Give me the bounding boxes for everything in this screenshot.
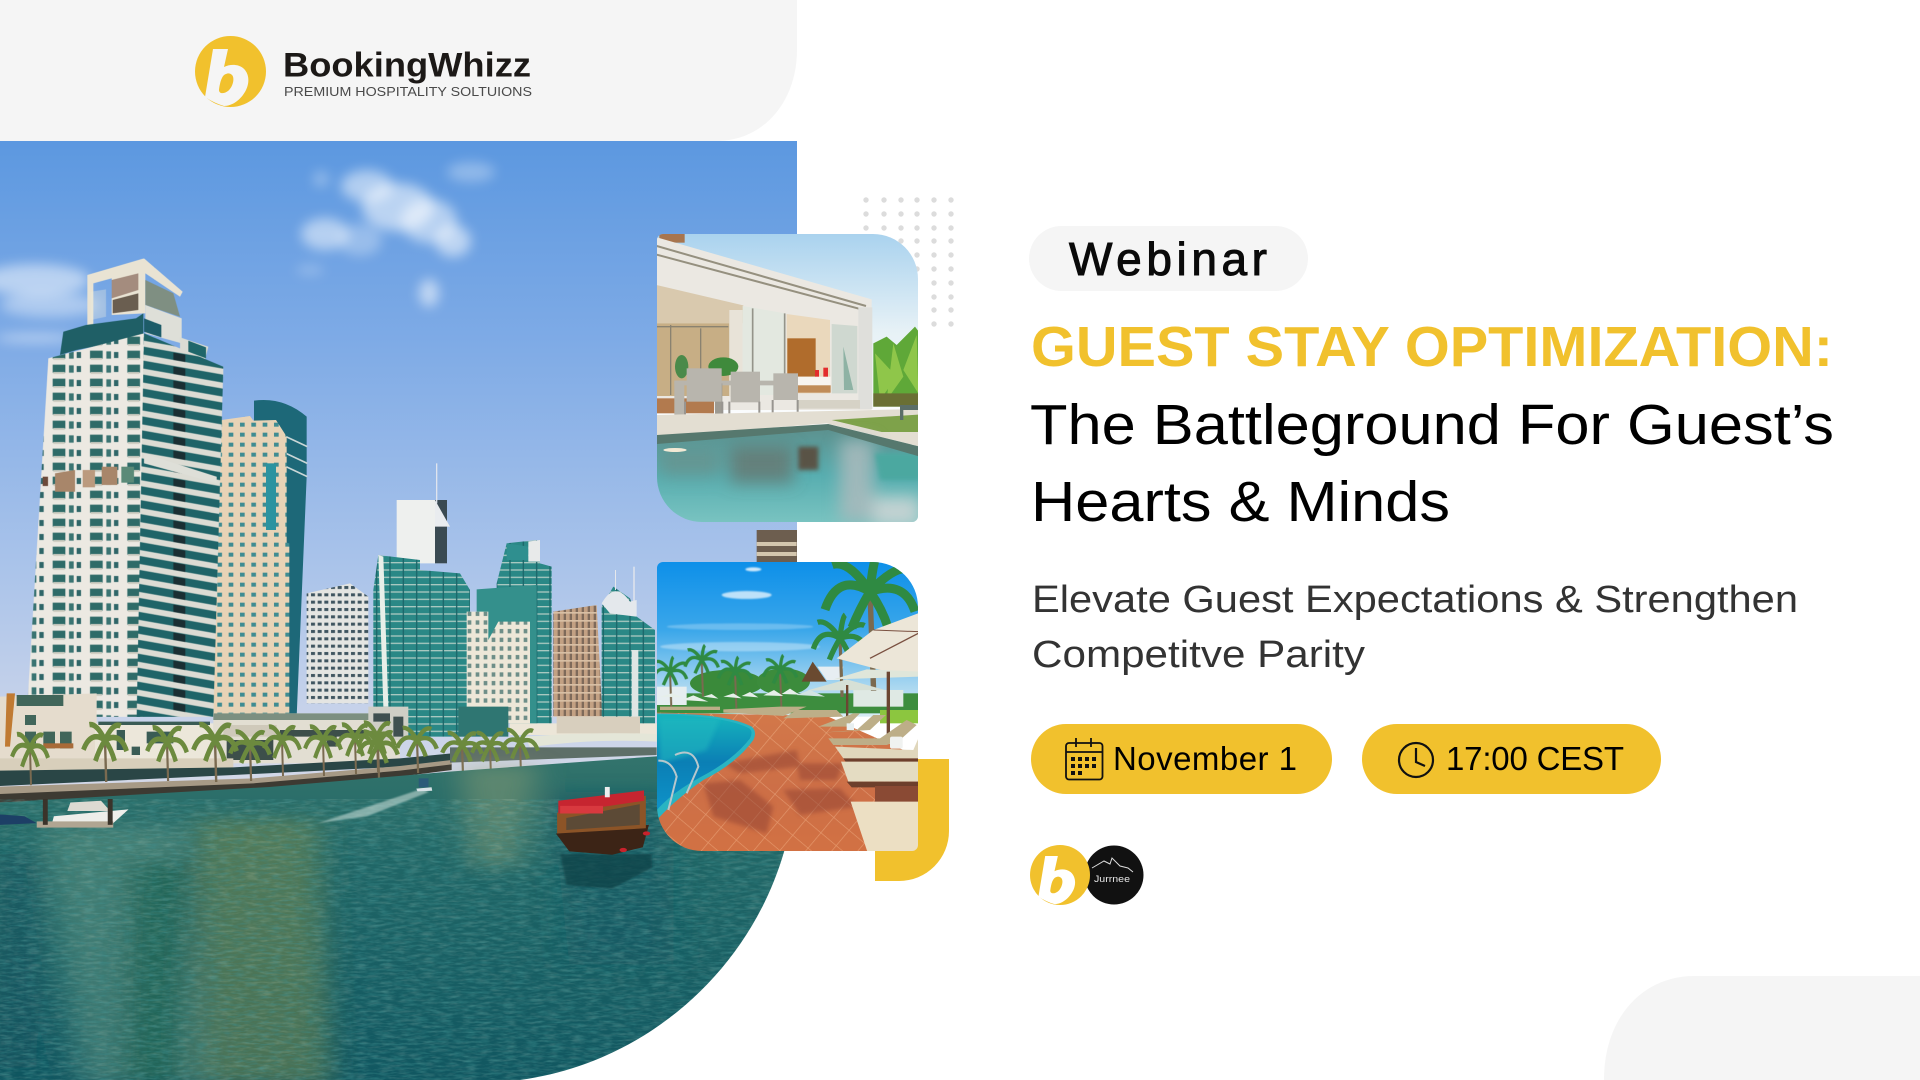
brand tagline: PREMIUM HOSPITALITY SOLTUIONS: [284, 85, 532, 99]
banana plant foliage: [873, 327, 920, 407]
pool: [657, 713, 755, 820]
parasols: [660, 613, 920, 740]
logo: Jurrnee: Jurrnee: [1094, 874, 1130, 885]
date pill: [1031, 724, 1332, 794]
dot pattern: [863, 197, 954, 327]
clouds: [660, 567, 820, 651]
clouds: [0, 162, 495, 342]
patio furniture: [674, 368, 799, 415]
tower: tall white residential tower: [27, 258, 223, 717]
header panel: grey logo area: [0, 0, 797, 141]
brand logo: BookingWhizz: [195, 36, 532, 107]
deck and lawn: [657, 405, 920, 447]
big palm: [825, 552, 915, 691]
date text: November 1: [1113, 740, 1297, 777]
icon: clock: [1399, 743, 1433, 777]
palm trees: [12, 723, 538, 785]
photo: Dubai marina skyline: [0, 141, 802, 1080]
icon: calendar: [1066, 738, 1102, 780]
moored white boat: [0, 799, 129, 828]
villa facade: [657, 237, 872, 413]
webinar badge: [1029, 226, 1308, 291]
logo: b: [1030, 845, 1090, 905]
title highlight line: GUEST STAY OPTIMIZATION:: [1031, 315, 1833, 379]
subtitle: Competitve Parity: [1032, 634, 1365, 676]
photo: villa with pool: [653, 230, 923, 527]
motor boat: [416, 778, 432, 791]
distant towers: [306, 463, 797, 737]
time pill: [1362, 724, 1661, 794]
decorative corner shape: [1604, 976, 1920, 1080]
time text: 17:00 CEST: [1446, 740, 1624, 777]
yellow accent shape: [875, 759, 949, 881]
partner logos: [1030, 845, 1144, 905]
boats: [0, 778, 652, 889]
pool water: [657, 424, 920, 527]
webinar badge: Webinar: [1069, 233, 1267, 285]
marina podium buildings: [0, 693, 452, 803]
tree line: [653, 645, 920, 723]
subtitle: Elevate Guest Expectations & Strengthen: [1032, 579, 1798, 621]
dhow boat: [556, 787, 652, 889]
title line 3: Hearts & Minds: [1031, 470, 1450, 534]
subtitle: [1032, 579, 1798, 676]
icon: b logo: [195, 36, 266, 107]
water: [0, 756, 802, 1080]
photo: resort pool with sun loungers: [653, 552, 923, 852]
title: [1030, 315, 1834, 534]
title line 2: The Battleground For Guest’s: [1030, 393, 1834, 457]
deck: [657, 713, 918, 851]
sun loungers: [660, 707, 918, 852]
tower: beige curved tower: [213, 400, 307, 717]
brand name: BookingWhizz: [283, 46, 531, 84]
